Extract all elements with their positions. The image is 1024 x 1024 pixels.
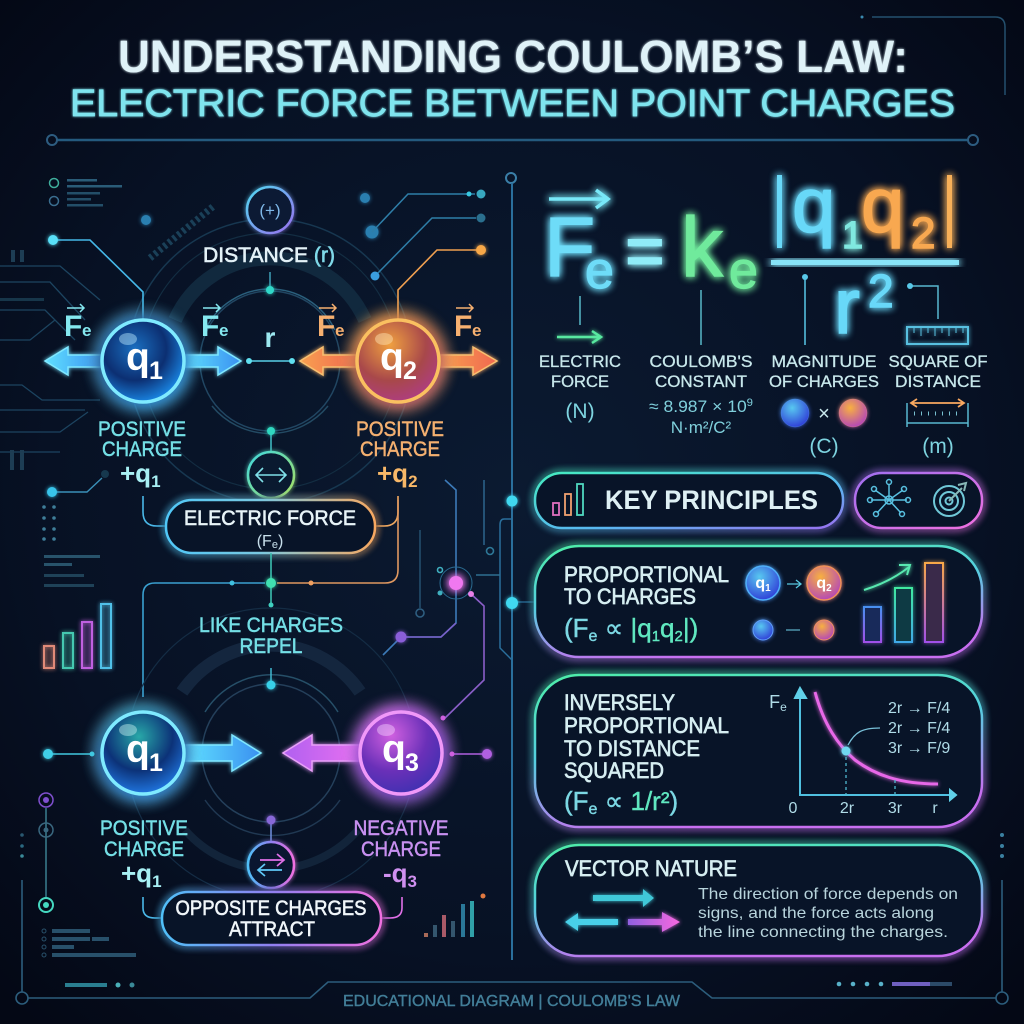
force labels: F (454, 310, 472, 343)
label: Coulomb's constant: COULOMB'S (650, 352, 752, 371)
formula force vector F_e (544, 190, 614, 300)
icon: target (934, 483, 966, 516)
distance ring system: upper (128, 193, 412, 503)
label: square of distance: SQUARE OF (888, 352, 988, 371)
rising bars (864, 563, 943, 642)
sphere: q2: q (380, 336, 404, 379)
formula denominator: r (834, 262, 860, 350)
label: magnitude of charges: × (818, 403, 830, 425)
inverse heading (564, 690, 729, 783)
icon: network (868, 480, 910, 516)
label: magnitude of charges: OF CHARGES (769, 372, 879, 391)
label: Coulomb's constant (649, 352, 753, 437)
label: Coulomb's constant: ≈ 8.987 × 10 (649, 397, 744, 416)
icon: ruler (907, 327, 968, 344)
circuit decoration: left upper (0, 178, 122, 470)
inverse heading: PROPORTIONAL (564, 713, 729, 738)
formula denominator (834, 262, 894, 350)
pill: electric force: ) (278, 533, 283, 550)
formula fraction bar (771, 260, 959, 265)
sphere: q2 (357, 320, 439, 402)
connectors to attract pill (143, 897, 402, 918)
label: positive charge q1: 1 (151, 472, 161, 491)
formula constant k_e (681, 200, 758, 300)
label: square of distance: (m) (922, 435, 954, 458)
label: positive charge lower: 1 (152, 872, 162, 891)
icon: force arrow green (557, 331, 601, 343)
label: positive charge lower: POSITIVE (100, 817, 188, 840)
label: positive charge q1 (98, 418, 186, 491)
panel: inverse square (535, 675, 982, 827)
icon: electric force (248, 452, 294, 498)
separation r: r (265, 322, 276, 353)
circuit node: pink (383, 480, 500, 720)
vector description: signs, and the force acts along (698, 905, 934, 922)
force arrows q2 (300, 347, 497, 375)
decoration: dot grid and data bars (42, 505, 100, 587)
separation r (246, 322, 295, 364)
label: electric force: (N) (565, 400, 595, 423)
inverse heading: SQUARED (564, 758, 664, 783)
inverse formula: e (589, 801, 598, 818)
proportional heading (564, 562, 729, 609)
label: Coulomb's constant: 9 (747, 397, 753, 409)
label: like charges repel (199, 614, 343, 658)
inverse formula: (F (564, 786, 589, 816)
inverse heading: TO DISTANCE (564, 736, 700, 761)
formula leaders (580, 274, 938, 345)
pill: opposite charges attract: ATTRACT (229, 918, 315, 941)
label: distance: DISTANCE (r) (203, 244, 335, 267)
chart: force versus distance: F (769, 692, 780, 712)
formula force vector F_e: F (544, 200, 595, 294)
left timeline decoration (20, 793, 53, 912)
footer label: EDUCATIONAL DIAGRAM | COULOMB'S LAW (343, 993, 681, 1010)
label: positive charge q2: CHARGE (360, 438, 440, 461)
label: positive charge q1: +q (120, 458, 151, 488)
chart: force versus distance: 2r → F/4 (888, 700, 950, 717)
vector description (698, 886, 958, 941)
label: positive charge q2: 2 (408, 472, 418, 491)
proportional heading: PROPORTIONAL (564, 562, 729, 587)
charge icons: 1 (765, 583, 771, 594)
chart: force versus distance: e (780, 700, 787, 714)
panel: proportional to charges (535, 546, 982, 657)
icon: distance: (+) (259, 201, 281, 220)
force labels: e (335, 321, 344, 340)
formula numerator: 2 (911, 209, 935, 258)
top right circuit leaders (370, 190, 486, 280)
proportional formula: e (589, 628, 598, 645)
sphere: q3 (360, 712, 442, 794)
proportional formula: (F (564, 613, 589, 643)
charge icons: 2 (826, 583, 832, 594)
label: magnitude of charges: MAGNITUDE (772, 352, 876, 371)
title (70, 31, 955, 125)
pill: electric force: e (272, 539, 278, 551)
chart: force versus distance: 3r → F/9 (888, 740, 950, 757)
sphere: q1 lower: q (126, 728, 150, 771)
sphere: q1: q (126, 336, 150, 379)
chart: force versus distance: 2r (840, 800, 855, 817)
label: positive charge q1: CHARGE (102, 438, 182, 461)
chart: force versus distance: 3r (888, 800, 903, 817)
mini bars decoration: lower right (424, 894, 486, 937)
label: electric force (539, 352, 621, 423)
formula constant k_e: k (681, 200, 724, 294)
inverse formula: ∝ (597, 786, 630, 816)
label: Coulomb's constant: N·m²/C² (671, 418, 732, 437)
inverse heading: INVERSELY (564, 690, 675, 715)
chart: force versus distance: 0 (789, 800, 798, 817)
vector description: The direction of force depends on (698, 886, 958, 903)
force labels: e (219, 321, 228, 340)
label: positive charge lower (100, 817, 188, 891)
chart: force versus distance: r (932, 800, 938, 817)
formula: Coulomb's law (544, 161, 959, 350)
force labels: F (201, 310, 219, 343)
label: electric force: FORCE (551, 372, 609, 391)
decorative bar chart: lower left (44, 604, 111, 668)
label: magnitude of charges: (C) (809, 435, 839, 458)
formula constant k_e: e (729, 242, 758, 300)
formula numerator (777, 161, 952, 258)
formula equals: = (625, 213, 665, 289)
connectors to electric force pill (143, 496, 398, 526)
leader: q2 (398, 245, 486, 320)
force labels: e (82, 321, 91, 340)
central vertical connector (500, 173, 535, 960)
label: like charges repel: REPEL (240, 635, 302, 658)
side node leaders: lower spheres (43, 716, 492, 759)
label: negative charge (354, 817, 448, 891)
formula numerator: q (861, 161, 904, 249)
pill: electric force (166, 500, 375, 553)
pill: opposite charges attract: OPPOSITE CHARGES (176, 897, 366, 920)
proportional heading: TO CHARGES (564, 584, 696, 609)
charge icons: q (816, 575, 826, 592)
title divider (47, 16, 1005, 145)
sphere: q3: q (382, 728, 406, 771)
proportional formula: 2 (675, 628, 683, 645)
proportional formula: |) (683, 613, 698, 643)
label: negative charge: NEGATIVE (354, 817, 448, 840)
label: negative charge: CHARGE (361, 838, 441, 861)
proportional formula: ∝ (597, 613, 630, 643)
label: positive charge q2: POSITIVE (356, 418, 444, 441)
ring system: lower (126, 608, 416, 898)
panel: vector nature (535, 845, 982, 956)
formula denominator: 2 (868, 265, 894, 317)
sphere: q1 lower (102, 712, 184, 794)
proportional formula: q (660, 613, 675, 643)
pill: key principles: KEY PRINCIPLES (605, 485, 818, 515)
inverse formula: 1/r²) (630, 786, 678, 816)
footer frame (16, 833, 1008, 1004)
force labels: e (472, 321, 481, 340)
leader: q1 (48, 235, 143, 320)
marker above lower ring (266, 668, 276, 690)
sphere: q1 lower: 1 (149, 749, 163, 777)
chart: force versus distance: 2r → F/4 (888, 720, 950, 737)
force arrow: q1 toward q3 (185, 735, 261, 771)
title: ELECTRIC FORCE BETWEEN POINT CHARGES (70, 83, 955, 125)
sphere: q3: 3 (405, 749, 419, 777)
vector heading: VECTOR NATURE (565, 856, 737, 881)
vector arrows (565, 889, 680, 932)
label: positive charge lower: +q (121, 858, 152, 888)
charge icons (746, 566, 841, 640)
charge icons: q (755, 575, 765, 592)
label: negative charge: 3 (408, 872, 417, 891)
formula numerator: q (792, 161, 835, 249)
label: positive charge q1: POSITIVE (98, 418, 186, 441)
pill: electric force: (F (257, 533, 272, 550)
node leader: left (47, 470, 109, 497)
connector network: electric force to lower diagram (143, 500, 398, 697)
vector description: the line connecting the charges. (698, 924, 948, 941)
label: square of distance: DISTANCE (895, 372, 981, 391)
proportional formula: |q (630, 613, 652, 643)
label: positive charge q2: +q (377, 458, 408, 488)
label: positive charge q2 (356, 418, 444, 491)
marker above force icon (267, 427, 275, 452)
sphere: q1: 1 (149, 357, 163, 385)
force labels (64, 304, 481, 343)
icon: distance (247, 187, 293, 233)
label: electric force: ELECTRIC (539, 352, 621, 371)
icon: attraction (248, 842, 294, 888)
label: magnitude of charges (769, 352, 879, 458)
label: like charges repel: LIKE CHARGES (199, 614, 343, 637)
label: square of distance (888, 352, 988, 458)
label: positive charge lower: CHARGE (104, 838, 184, 861)
pill: key principles (535, 473, 843, 528)
label: Coulomb's constant: CONSTANT (655, 372, 747, 391)
force labels: F (317, 310, 335, 343)
label: negative charge: -q (383, 858, 408, 888)
formula numerator: 1 (842, 215, 863, 257)
data rows decoration: lower left (42, 929, 136, 988)
formula force vector F_e: e (585, 242, 614, 300)
distance marker (266, 272, 274, 294)
sphere: q2: 2 (403, 357, 417, 385)
sphere: q1 (102, 320, 184, 402)
pill: opposite charges attract (162, 892, 381, 945)
icon: key principles bars (553, 484, 583, 515)
proportional formula: 1 (652, 628, 660, 645)
force arrows q1 (45, 347, 241, 375)
pill: network and target icons (855, 473, 982, 528)
force arrow: q3 toward q1 (283, 735, 360, 771)
force labels: F (64, 310, 82, 343)
marker above attract icon (266, 816, 276, 842)
chart: force versus distance (769, 688, 956, 817)
pill: electric force: ELECTRIC FORCE (184, 507, 356, 530)
title: UNDERSTANDING COULOMB’S LAW: (118, 31, 908, 82)
